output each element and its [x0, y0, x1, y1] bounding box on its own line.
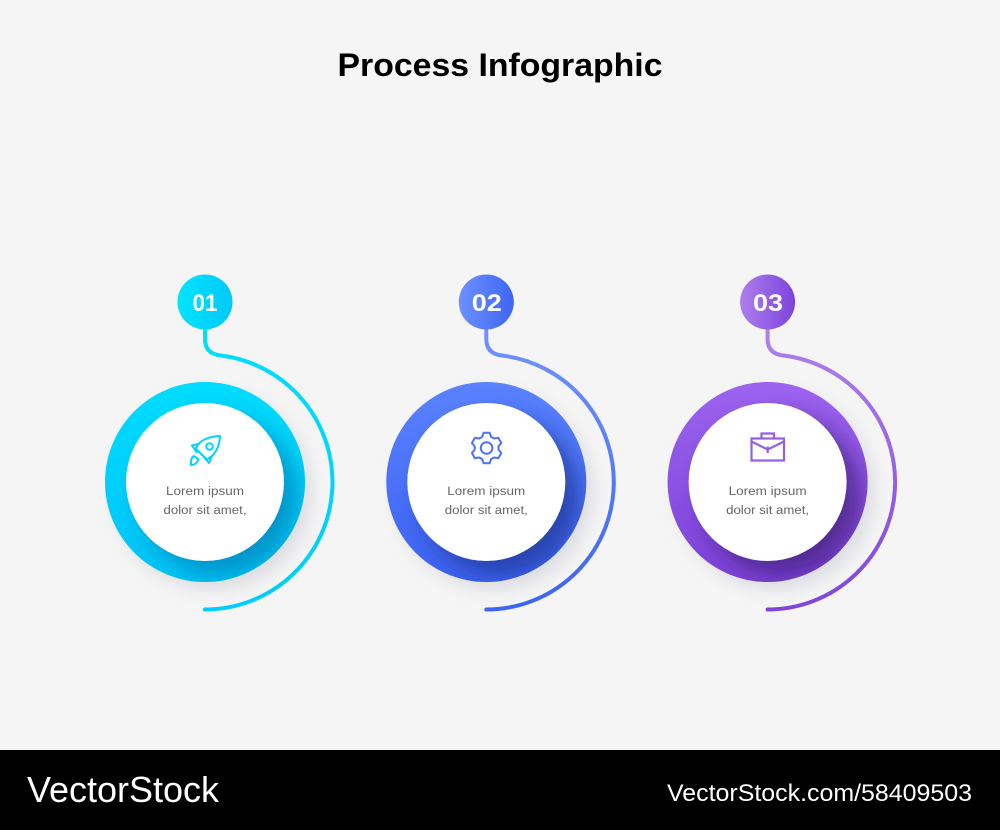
connector line 2 [486, 325, 614, 610]
main circle 3 [668, 382, 874, 589]
icon: rocket [191, 436, 220, 465]
text 1 [164, 486, 246, 517]
connector line 1 [205, 325, 332, 610]
main circle 1 [105, 382, 311, 589]
text 2 [445, 486, 528, 517]
text 1: Lorem ipsum [166, 486, 244, 498]
text 3: Lorem ipsum [729, 486, 807, 498]
icon: gear [472, 433, 501, 463]
text 2: Lorem ipsum [447, 486, 525, 498]
number badge 2: 02 [472, 290, 502, 317]
number badge 1: 01 [192, 290, 218, 317]
text 1: dolor sit amet, [164, 505, 246, 517]
text 2: dolor sit amet, [445, 505, 528, 517]
number badge 2 [459, 274, 514, 330]
number badge 3 [740, 274, 795, 330]
watermark bar [0, 750, 1000, 830]
watermark logo: VectorStock [27, 769, 220, 810]
step 1 [105, 274, 332, 610]
title: Process Infographic [338, 47, 662, 83]
main circle 2 [386, 382, 592, 589]
text 3 [726, 486, 809, 517]
number badge 1 [178, 274, 232, 330]
number badge 3: 03 [753, 290, 783, 317]
icon: briefcase [752, 434, 784, 460]
step 2 [386, 274, 614, 610]
watermark url: VectorStock.com/58409503 [667, 780, 972, 807]
text 3: dolor sit amet, [726, 505, 809, 517]
connector line 3 [768, 325, 895, 610]
step 3 [668, 274, 895, 610]
